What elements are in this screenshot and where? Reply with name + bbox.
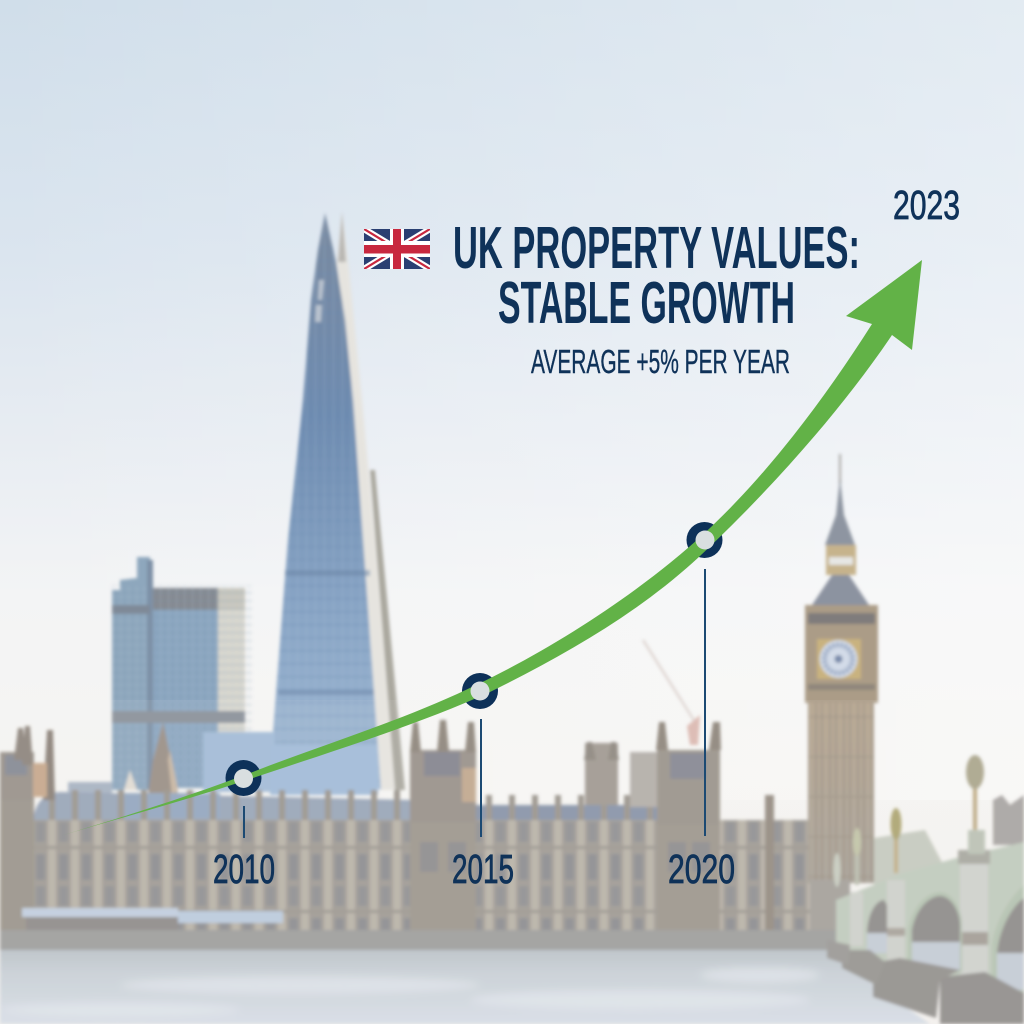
title: STABLE GROWTH — [498, 270, 795, 336]
bridge stone bases — [940, 972, 1024, 1024]
tower block — [112, 557, 378, 795]
label: 2020: 2020 — [668, 846, 735, 892]
buildings right of Big Ben — [874, 795, 1024, 885]
bridge piers — [960, 860, 988, 978]
subtitle: AVERAGE +5% PER YEAR — [531, 343, 790, 380]
water — [0, 950, 930, 1024]
crane — [643, 640, 700, 745]
UK flag icon — [364, 229, 430, 269]
title — [453, 215, 860, 336]
label: 2015: 2015 — [452, 846, 514, 892]
river bank — [0, 908, 840, 950]
Parliament towers — [0, 720, 774, 930]
Westminster Bridge — [827, 842, 1024, 1024]
The Shard — [272, 212, 405, 790]
lower Big Ben surroundings — [810, 880, 850, 932]
label: 2010: 2010 — [213, 846, 275, 892]
Big Ben — [805, 454, 878, 883]
water highlights — [0, 967, 820, 1017]
skyline buildings — [0, 212, 1024, 1024]
marker rings — [226, 522, 722, 796]
label: 2023: 2023 — [893, 182, 960, 228]
green arrow — [60, 260, 922, 836]
bridge arches — [908, 892, 962, 975]
haze overlay — [0, 700, 1024, 1024]
Parliament facade — [0, 820, 810, 932]
marker centres — [234, 530, 714, 788]
Parliament roofs — [33, 782, 810, 847]
leader lines — [244, 569, 705, 838]
bridge lamps — [834, 755, 985, 887]
chart: growth curve — [60, 260, 922, 838]
Parliament mid spire — [124, 722, 178, 795]
